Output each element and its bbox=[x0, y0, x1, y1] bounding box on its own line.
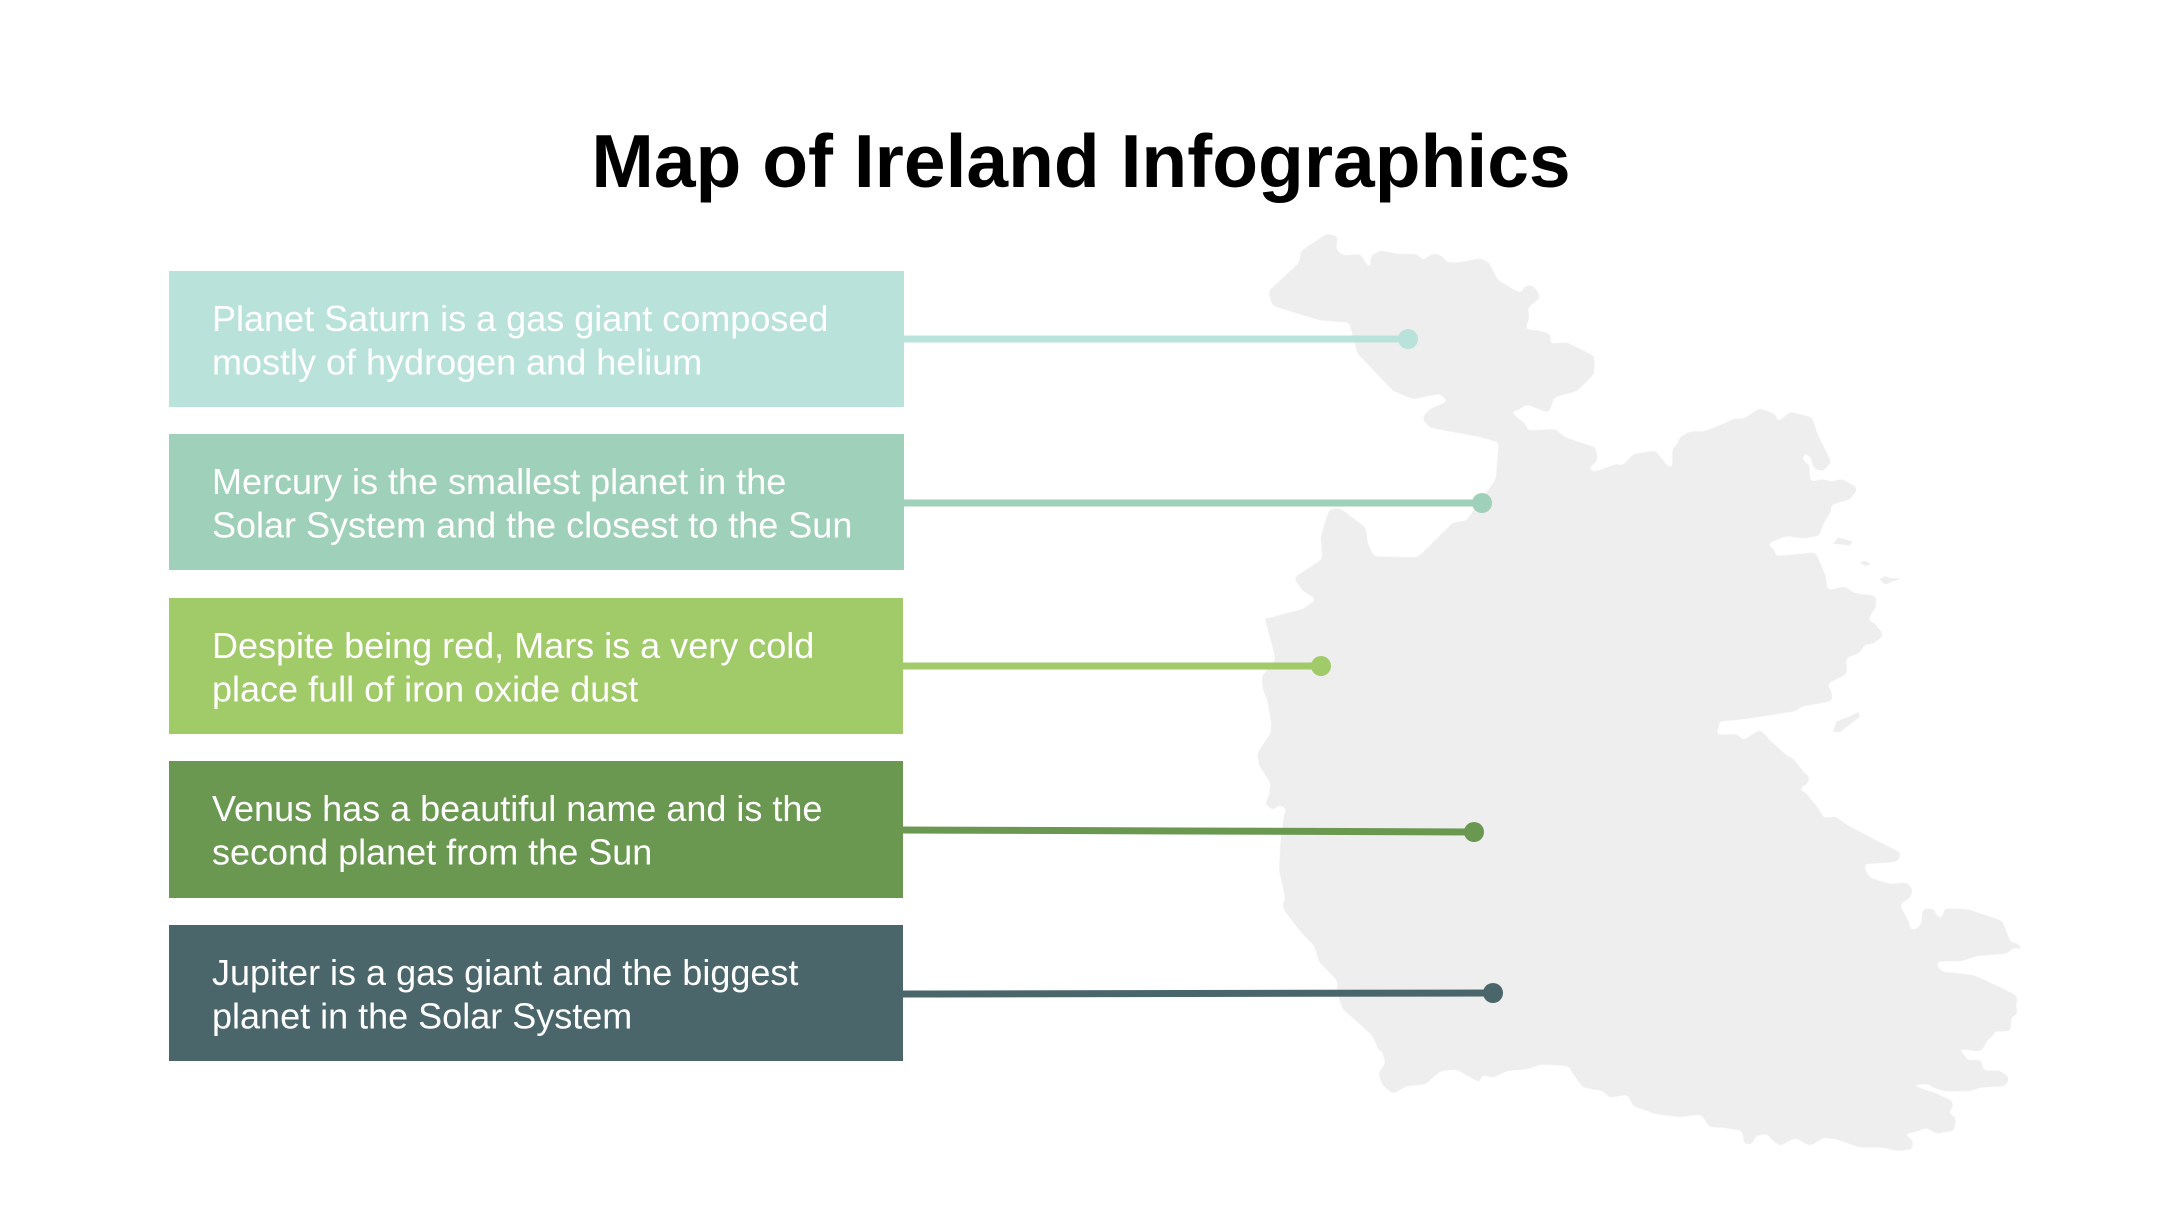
panel: Saturn bbox=[169, 271, 904, 407]
panel: Saturn: mostly of hydrogen and helium bbox=[212, 342, 702, 382]
title: Map of Ireland Infographics bbox=[591, 119, 1571, 203]
panel: Saturn: Planet Saturn is a gas giant composed bbox=[212, 298, 828, 339]
connector line and dot: Saturn bbox=[904, 329, 1418, 349]
panel: Venus: second planet from the Sun bbox=[212, 832, 652, 872]
connector line and dot: Venus bbox=[903, 822, 1484, 842]
panel: Mars: Despite being red, Mars is a very cold bbox=[212, 625, 814, 666]
panel: Jupiter bbox=[169, 925, 903, 1061]
map of Ireland bbox=[1258, 235, 2023, 1150]
panel: Mercury bbox=[169, 434, 904, 570]
panel: Mars: place full of iron oxide dust bbox=[212, 668, 638, 710]
panel: Mercury: Mercury is the smallest planet in the bbox=[212, 461, 786, 502]
connector line and dot: Mars bbox=[903, 656, 1331, 676]
panel: Jupiter: Jupiter is a gas giant and the biggest bbox=[212, 952, 798, 993]
panel: Venus: Venus has a beautiful name and is the bbox=[212, 788, 822, 829]
connector line and dot: Jupiter bbox=[903, 983, 1503, 1003]
connector line and dot: Mercury bbox=[904, 493, 1492, 513]
panel: Venus bbox=[169, 761, 903, 898]
panel: Jupiter: planet in the Solar System bbox=[212, 996, 632, 1036]
panel: Mars bbox=[169, 598, 903, 734]
panel: Mercury: Solar System and the closest to the Sun bbox=[212, 504, 852, 546]
